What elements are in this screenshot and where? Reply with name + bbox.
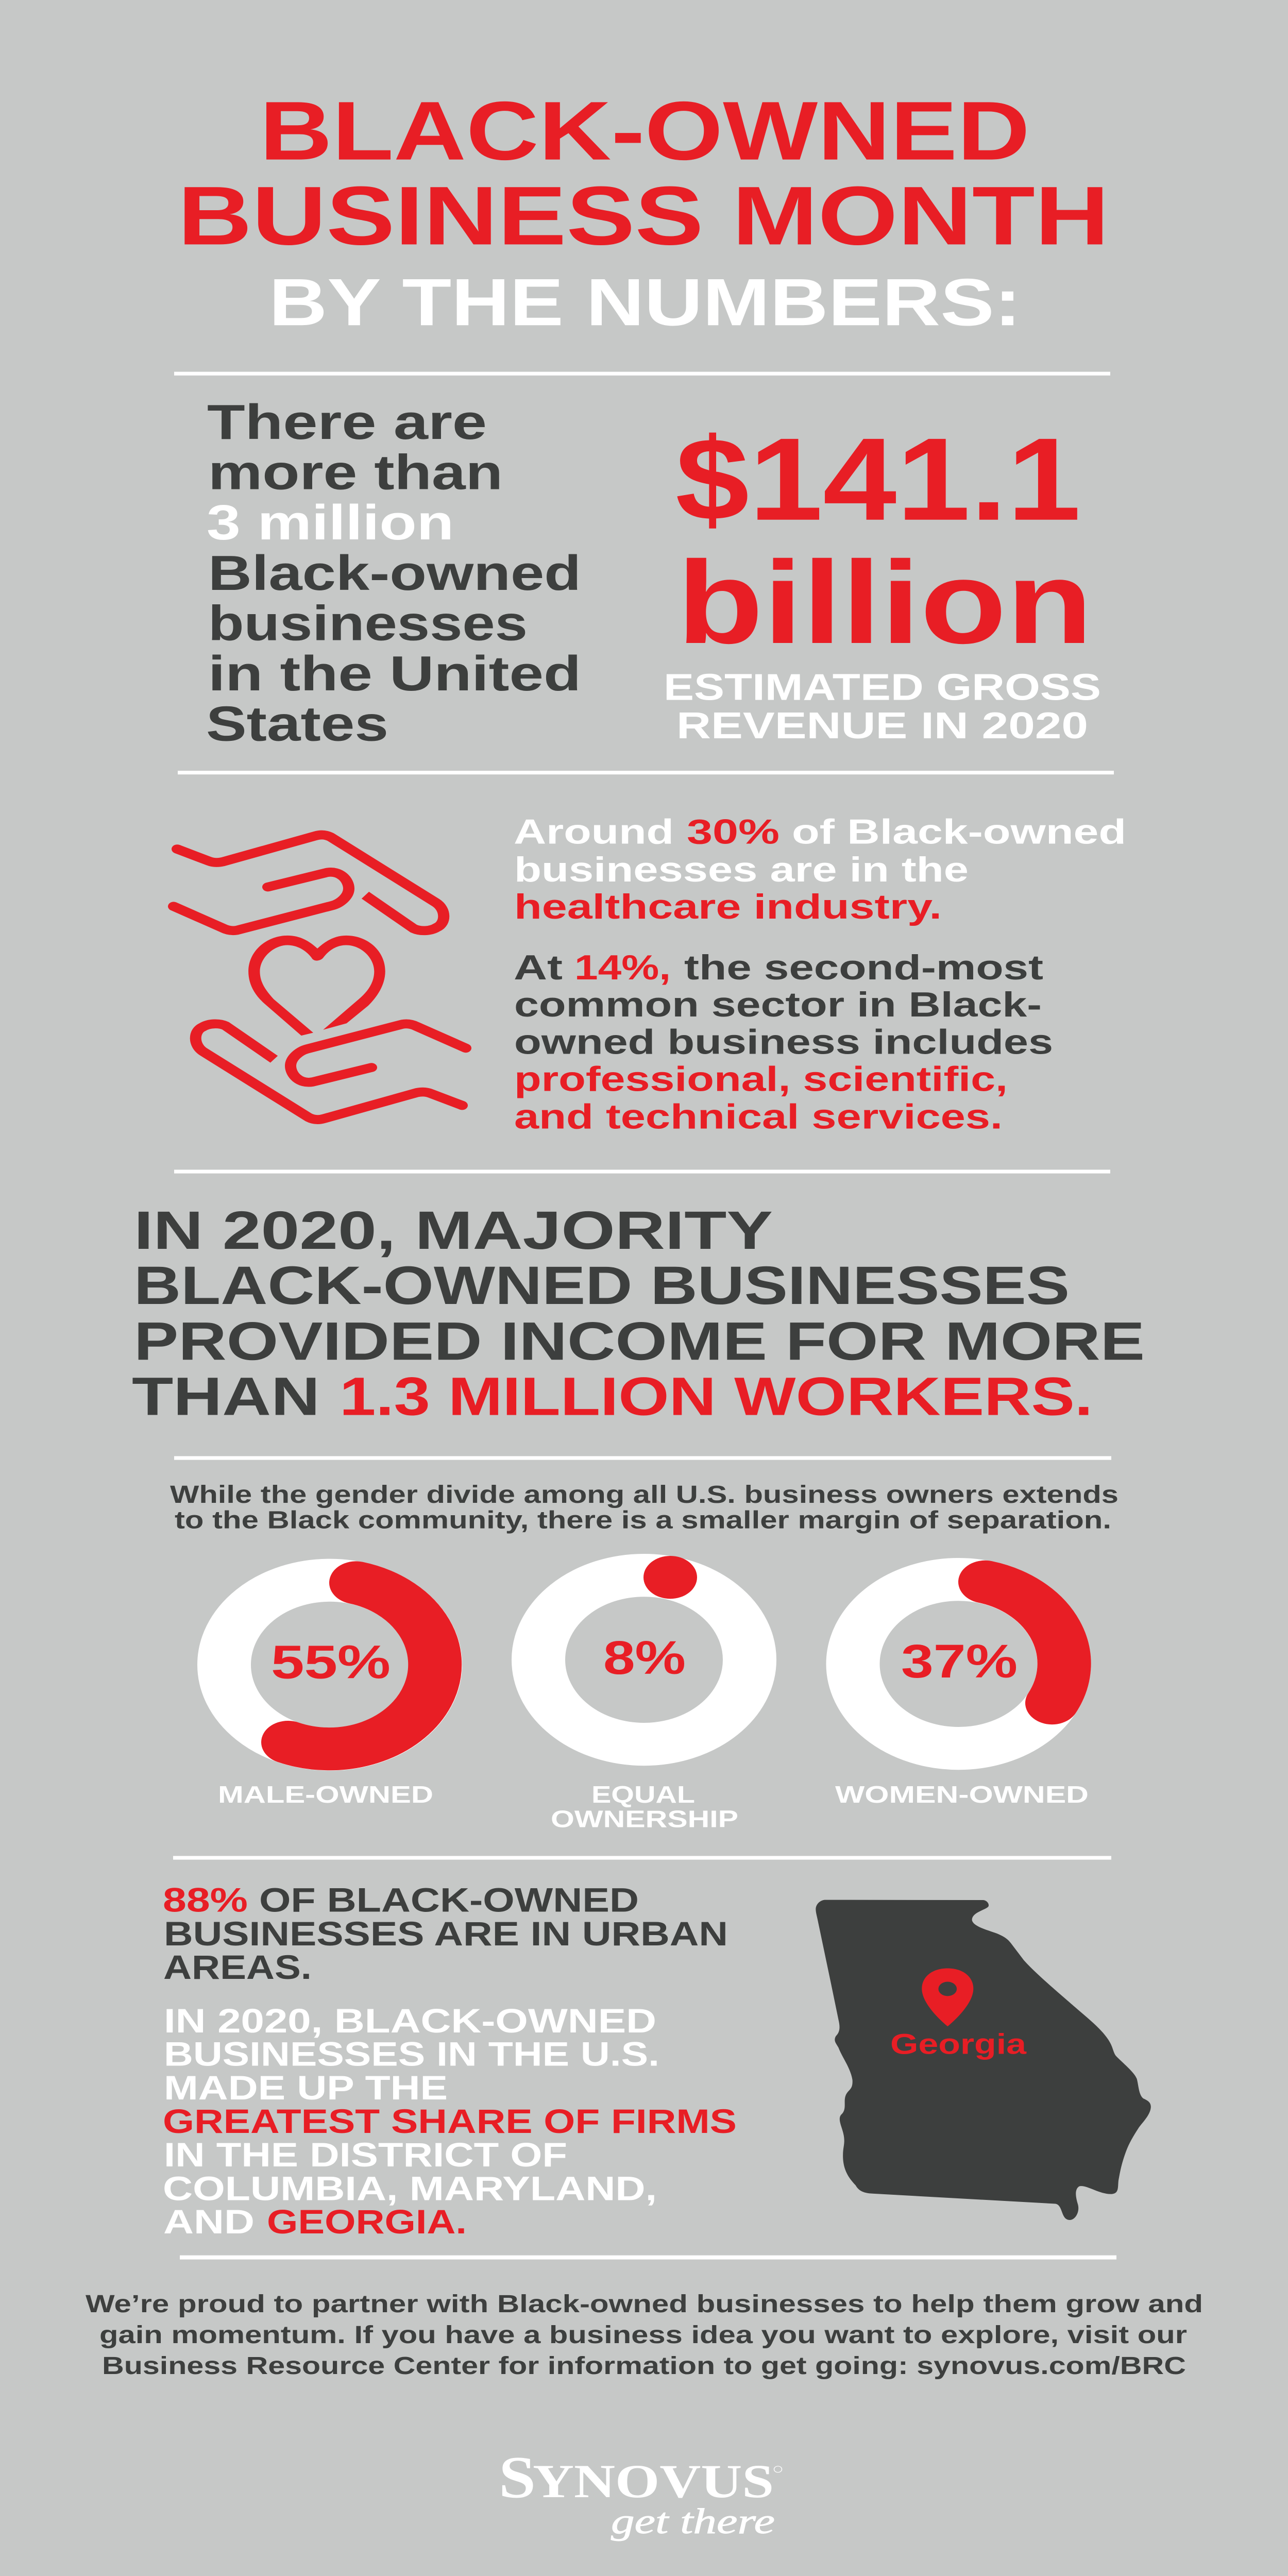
text block: 3 million businesses: There are bbox=[207, 395, 487, 450]
logo: Synovus get there: S bbox=[499, 2445, 536, 2511]
title: BUSINESS MONTH bbox=[178, 169, 1109, 262]
chart: women-owned donut: WOMEN-OWNED bbox=[835, 1782, 1089, 1808]
text block: healthcare 30%: of Black-owned bbox=[792, 812, 1126, 852]
icon: map pin bbox=[922, 1968, 973, 2026]
logo: Synovus get there: get there bbox=[611, 2501, 775, 2541]
text block: greatest share of firms: IN THE DISTRICT OF bbox=[164, 2136, 567, 2174]
heading: 1.3 million workers: IN 2020, MAJORITY bbox=[134, 1200, 773, 1261]
map: Georgia bbox=[816, 1900, 1151, 2220]
panel: healthcare sector bbox=[172, 812, 1126, 1136]
chart: equal ownership donut: OWNERSHIP bbox=[551, 1806, 738, 1833]
map label: Georgia bbox=[890, 2028, 1027, 2060]
text block: 88% urban bbox=[163, 1881, 728, 1986]
chart: women-owned donut bbox=[835, 1580, 1089, 1808]
text block: 3 million businesses: Black-owned bbox=[208, 546, 581, 601]
text block: $141.1 billion revenue: REVENUE IN 2020 bbox=[676, 705, 1088, 747]
chart: women-owned donut: 37% bbox=[901, 1635, 1018, 1688]
text block: professional services 14%: owned business includes bbox=[514, 1023, 1053, 1062]
text block: closing statement: We’re proud to partner with Black-owned businesses to help them grow and bbox=[86, 2290, 1203, 2318]
logo: Synovus get there bbox=[499, 2445, 782, 2541]
heading: 1.3 million workers: BLACK-OWNED BUSINESSES bbox=[134, 1256, 1070, 1316]
text block: $141.1 billion revenue: $141.1 bbox=[675, 413, 1081, 545]
text block: 3 million businesses: more than bbox=[208, 445, 503, 500]
title: BLACK-OWNED bbox=[260, 84, 1030, 177]
text block: gender divide intro: to the Black community, there is a smaller margin of separation. bbox=[175, 1506, 1111, 1534]
heading: 1.3 million workers bbox=[132, 1200, 1145, 1427]
chart: equal ownership donut bbox=[538, 1556, 750, 1833]
heading: 1.3 million workers: THAN bbox=[132, 1367, 320, 1427]
chart: male-owned donut bbox=[218, 1580, 435, 1808]
text block: healthcare 30% bbox=[514, 812, 1126, 926]
text block: professional services 14%: common sector in Black- bbox=[514, 985, 1042, 1024]
text block: 88% urban: BUSINESSES ARE IN URBAN bbox=[164, 1915, 728, 1953]
text block: healthcare 30%: businesses are in the bbox=[514, 850, 969, 889]
text block: professional services 14%: and technical services. bbox=[514, 1097, 1003, 1136]
text block: gender divide intro bbox=[170, 1481, 1118, 1534]
text block: professional services 14%: 14%, bbox=[574, 948, 671, 987]
text block: healthcare 30%: healthcare industry. bbox=[514, 887, 942, 926]
chart: male-owned donut: 55% bbox=[271, 1636, 391, 1689]
heading: 1.3 million workers: PROVIDED INCOME FOR MORE bbox=[134, 1312, 1145, 1371]
text block: closing statement bbox=[86, 2290, 1203, 2380]
chart: male-owned donut: MALE-OWNED bbox=[218, 1782, 433, 1808]
text block: greatest share of firms: GREATEST SHARE OF FIRMS bbox=[163, 2103, 737, 2140]
text block: greatest share of firms: BUSINESSES IN THE U.S. bbox=[164, 2035, 659, 2073]
text block: greatest share of firms: COLUMBIA, MARYLAND, bbox=[163, 2170, 657, 2208]
logo: Synovus get there: YNOVUS bbox=[533, 2455, 774, 2508]
chart: equal ownership donut: 8% bbox=[603, 1632, 686, 1684]
text block: professional services 14%: At bbox=[514, 948, 563, 987]
text block: closing statement: Business Resource Center for information to get going: synovus.com/BRC bbox=[102, 2352, 1186, 2380]
title bbox=[178, 84, 1109, 340]
text block: 88% urban: AREAS. bbox=[163, 1948, 312, 1986]
text block: $141.1 billion revenue: billion bbox=[677, 536, 1093, 668]
text block: professional services 14% bbox=[514, 948, 1053, 1136]
panel: businesses and revenue bbox=[206, 395, 1101, 752]
text block: professional services 14%: the second-most bbox=[684, 948, 1043, 987]
text block: greatest share of firms: IN 2020, BLACK-OWNED bbox=[164, 2002, 656, 2040]
text block: greatest share of firms bbox=[163, 2002, 737, 2241]
text block: greatest share of firms: AND bbox=[163, 2203, 255, 2241]
icon part: lower hand bbox=[196, 1024, 468, 1120]
text block: 3 million businesses: 3 million bbox=[207, 496, 454, 550]
text block: greatest share of firms: MADE UP THE bbox=[164, 2069, 448, 2107]
text block: healthcare 30%: Around bbox=[514, 812, 674, 852]
text block: healthcare 30%: 30% bbox=[687, 812, 779, 852]
text block: gender divide intro: While the gender divide among all U.S. business owners extends bbox=[170, 1481, 1118, 1508]
icon part: upper hand bbox=[172, 835, 444, 930]
text block: $141.1 billion revenue bbox=[664, 413, 1101, 747]
icon part: heart bbox=[248, 936, 385, 1036]
text block: 3 million businesses: in the United bbox=[208, 646, 581, 701]
heading: 1.3 million workers: 1.3 MILLION WORKERS. bbox=[340, 1367, 1093, 1427]
text block: professional services 14%: professional, scientific, bbox=[514, 1060, 1008, 1099]
panel: urban and state share bbox=[163, 1881, 1151, 2241]
chart: equal ownership donut: EQUAL bbox=[591, 1782, 695, 1808]
text block: closing statement: gain momentum. If you have a business idea you want to explore, visit our bbox=[99, 2321, 1187, 2349]
text block: 3 million businesses: States bbox=[206, 697, 388, 752]
title: BY THE NUMBERS: bbox=[269, 265, 1021, 340]
text block: $141.1 billion revenue: ESTIMATED GROSS bbox=[664, 667, 1101, 708]
icon: hands holding heart bbox=[172, 835, 468, 1120]
text block: 3 million businesses: businesses bbox=[208, 596, 528, 651]
text block: greatest share of firms: GEORGIA. bbox=[267, 2203, 467, 2241]
text block: 88% urban: 88% bbox=[163, 1881, 248, 1919]
text block: 88% urban: OF BLACK-OWNED bbox=[259, 1881, 639, 1919]
text block: 3 million businesses bbox=[206, 395, 581, 752]
